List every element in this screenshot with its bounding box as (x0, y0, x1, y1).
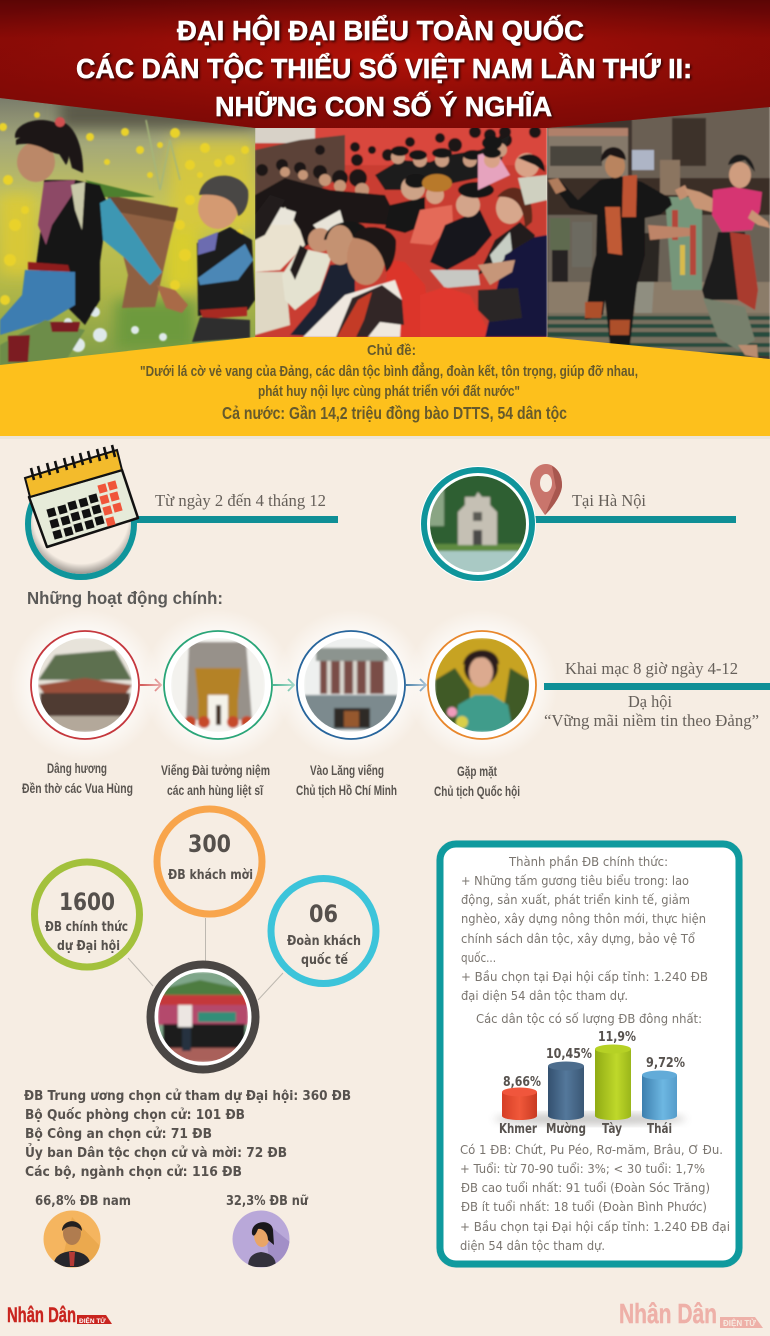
photo: woman and child in flower field (0, 95, 256, 367)
bar chart: Khmer (499, 1122, 537, 1137)
location row (420, 464, 736, 582)
theme text: phát huy nội lực cùng phát triển với đất nước" (258, 384, 520, 400)
delegate breakdown list: Bộ Quốc phòng chọn cử: 101 ĐB (25, 1108, 245, 1123)
theme band (0, 337, 770, 439)
panel: official delegates composition (437, 841, 742, 1267)
logo: watermark: ĐIỆN TỬ (723, 1319, 756, 1328)
logo: watermark: Nhân Dân (619, 1298, 717, 1329)
stat: 300 guest delegates (157, 809, 262, 914)
photo: parade in centre ring (150, 964, 256, 1070)
location text: Tại Hà Nội (572, 491, 646, 510)
arrow: blue (406, 679, 426, 691)
activity 4: meeting National Assembly chair (408, 620, 548, 799)
upper panel text: Thành phần ĐB chính thức: (508, 855, 668, 869)
activity 2: martyrs memorial: Viếng Đài tưởng niệm (161, 762, 270, 778)
upper panel text (461, 855, 708, 1026)
upper panel text: chính sách dân tộc, xây dựng, bảo vệ Tổ (461, 932, 696, 946)
activity 3: Ho Chi Minh mausoleum: Chủ tịch Hồ Chí Minh (296, 782, 397, 798)
male share (35, 1194, 131, 1270)
stat: 1600 official delegates (34, 862, 140, 967)
lower panel text: ĐB cao tuổi nhất: 91 tuổi (Đoàn Sóc Trăng) (461, 1181, 710, 1195)
bar chart: 8,66% (503, 1075, 541, 1090)
title: NHỮNG CON SỐ Ý NGHĨA (215, 90, 552, 122)
photo: Turtle Tower ring (420, 466, 536, 582)
lower panel text: + Tuổi: từ 70-90 tuổi: 3%; < 30 tuổi: 1,7% (460, 1162, 705, 1176)
bar chart: Mường (546, 1122, 586, 1137)
activity 3: Ho Chi Minh mausoleum (276, 620, 414, 798)
activity 2: martyrs memorial (144, 620, 282, 798)
stat: 300 guest delegates: ĐB khách mời (168, 868, 253, 883)
lower panel text: ĐB ít tuổi nhất: 18 tuổi (Đoàn Bình Phước) (461, 1200, 707, 1214)
date connector line (135, 516, 338, 523)
connector lines (128, 918, 283, 1000)
lower panel text: Có 1 ĐB: Chứt, Pu Péo, Rơ-măm, Brâu, Ơ Đu. (460, 1143, 723, 1157)
stat: 06 international delegations: 06 (309, 900, 338, 928)
opening and gala text: Dạ hội (628, 692, 672, 711)
stat: 1600 official delegates: dự Đại hội (57, 939, 120, 954)
stat: 1600 official delegates: 1600 (59, 888, 115, 916)
bar chart (494, 1030, 686, 1137)
stat: 06 international delegations: Đoàn khách (287, 934, 361, 949)
delegate breakdown list: Các bộ, ngành chọn cử: 116 ĐB (25, 1165, 242, 1180)
stat: 06 international delegations: quốc tế (301, 953, 348, 968)
delegate breakdown list (24, 1089, 351, 1180)
section heading: main activities: Những hoạt động chính: (27, 588, 223, 608)
upper panel text: quốc... (461, 951, 496, 965)
female share (226, 1194, 309, 1270)
date text: Từ ngày 2 đến 4 tháng 12 (155, 491, 326, 510)
activity 4: meeting National Assembly chair: Chủ tịch Quốc hội (434, 783, 520, 799)
photo: delegates in conference hall (255, 125, 547, 340)
opening and gala text: Khai mạc 8 giờ ngày 4-12 (565, 659, 738, 678)
theme text (140, 342, 638, 423)
location connector line (533, 516, 736, 523)
upper panel text: đại diện 54 dân tộc tham dự. (461, 989, 628, 1003)
stat: 06 international delegations (271, 878, 376, 984)
stat: 1600 official delegates: ĐB chính thức (45, 920, 128, 935)
upper panel text: + Những tấm gương tiêu biểu trong: lao (461, 874, 689, 888)
delegate breakdown list: ĐB Trung ương chọn cử tham dự Đại hội: 360 ĐB (24, 1089, 351, 1104)
male share: 66,8% ĐB nam (35, 1194, 131, 1209)
title: ĐẠI HỘI ĐẠI BIỂU TOÀN QUỐC (177, 14, 584, 46)
logo: Nhan Dan: ĐIỆN TỬ (79, 1316, 106, 1325)
activity 3: Ho Chi Minh mausoleum: Vào Lăng viếng (310, 762, 384, 778)
lower panel text: + Bầu chọn tại Đại hội cấp tỉnh: 1.240 ĐB đại (460, 1220, 730, 1234)
calendar ring (27, 470, 135, 578)
photo: traditional bamboo dance (547, 100, 770, 365)
stat: 300 guest delegates: 300 (188, 830, 231, 858)
bar chart: 11,9% (598, 1030, 636, 1045)
delegate breakdown list: Bộ Công an chọn cử: 71 ĐB (25, 1127, 212, 1142)
arrow: red (140, 679, 161, 691)
delegate breakdown list: Ủy ban Dân tộc chọn cử và mời: 72 ĐB (25, 1144, 287, 1161)
upper panel text: + Bầu chọn tại Đại hội cấp tỉnh: 1.240 ĐB (461, 970, 708, 984)
lower panel text (460, 1143, 730, 1253)
icon: calendar (25, 445, 138, 547)
bar chart: Tày (602, 1122, 622, 1137)
activity 1: incense at Hung Kings temple (20, 620, 148, 796)
upper panel text: động, sản xuất, phát triển kinh tế, giảm (461, 893, 690, 907)
theme text: Cả nước: Gần 14,2 triệu đồng bào DTTS, 54 dân tộc (222, 403, 567, 423)
theme text: Chủ đề: (367, 342, 416, 359)
opening and gala text: “Vững mãi niềm tin theo Đảng” (544, 711, 759, 730)
female share: 32,3% ĐB nữ (226, 1194, 309, 1209)
theme text: "Dưới lá cờ vẻ vang của Đảng, các dân tộc bình đẳng, đoàn kết, tôn trọng, giúp đỡ nhau, (140, 362, 638, 380)
activity 4: meeting National Assembly chair: Gặp mặt (457, 763, 497, 779)
logo: Nhan Dan: Nhân Dân (7, 1304, 76, 1327)
arrow: green (273, 679, 294, 691)
activity 2: martyrs memorial: các anh hùng liệt sĩ (167, 782, 264, 798)
activity 1: incense at Hung Kings temple: Đền thờ các Vua Hùng (22, 780, 133, 796)
title: CÁC DÂN TỘC THIỂU SỐ VIỆT NAM LẦN THỨ II: (76, 52, 692, 84)
bar chart: 10,45% (546, 1047, 592, 1062)
lower panel text: diện 54 dân tộc tham dự. (460, 1239, 605, 1253)
title (76, 14, 692, 122)
bar chart: 9,72% (646, 1056, 685, 1071)
icon: map pin (530, 464, 562, 515)
header ribbon (0, 0, 770, 128)
activity 1: incense at Hung Kings temple: Dâng hương (47, 760, 107, 776)
bar chart: Thái (647, 1122, 672, 1137)
opening and gala text (544, 659, 770, 730)
upper panel text: Các dân tộc có số lượng ĐB đông nhất: (476, 1012, 702, 1026)
upper panel text: nghèo, xây dựng nông thôn mới, thực hiện (461, 912, 706, 926)
date row (25, 445, 338, 578)
